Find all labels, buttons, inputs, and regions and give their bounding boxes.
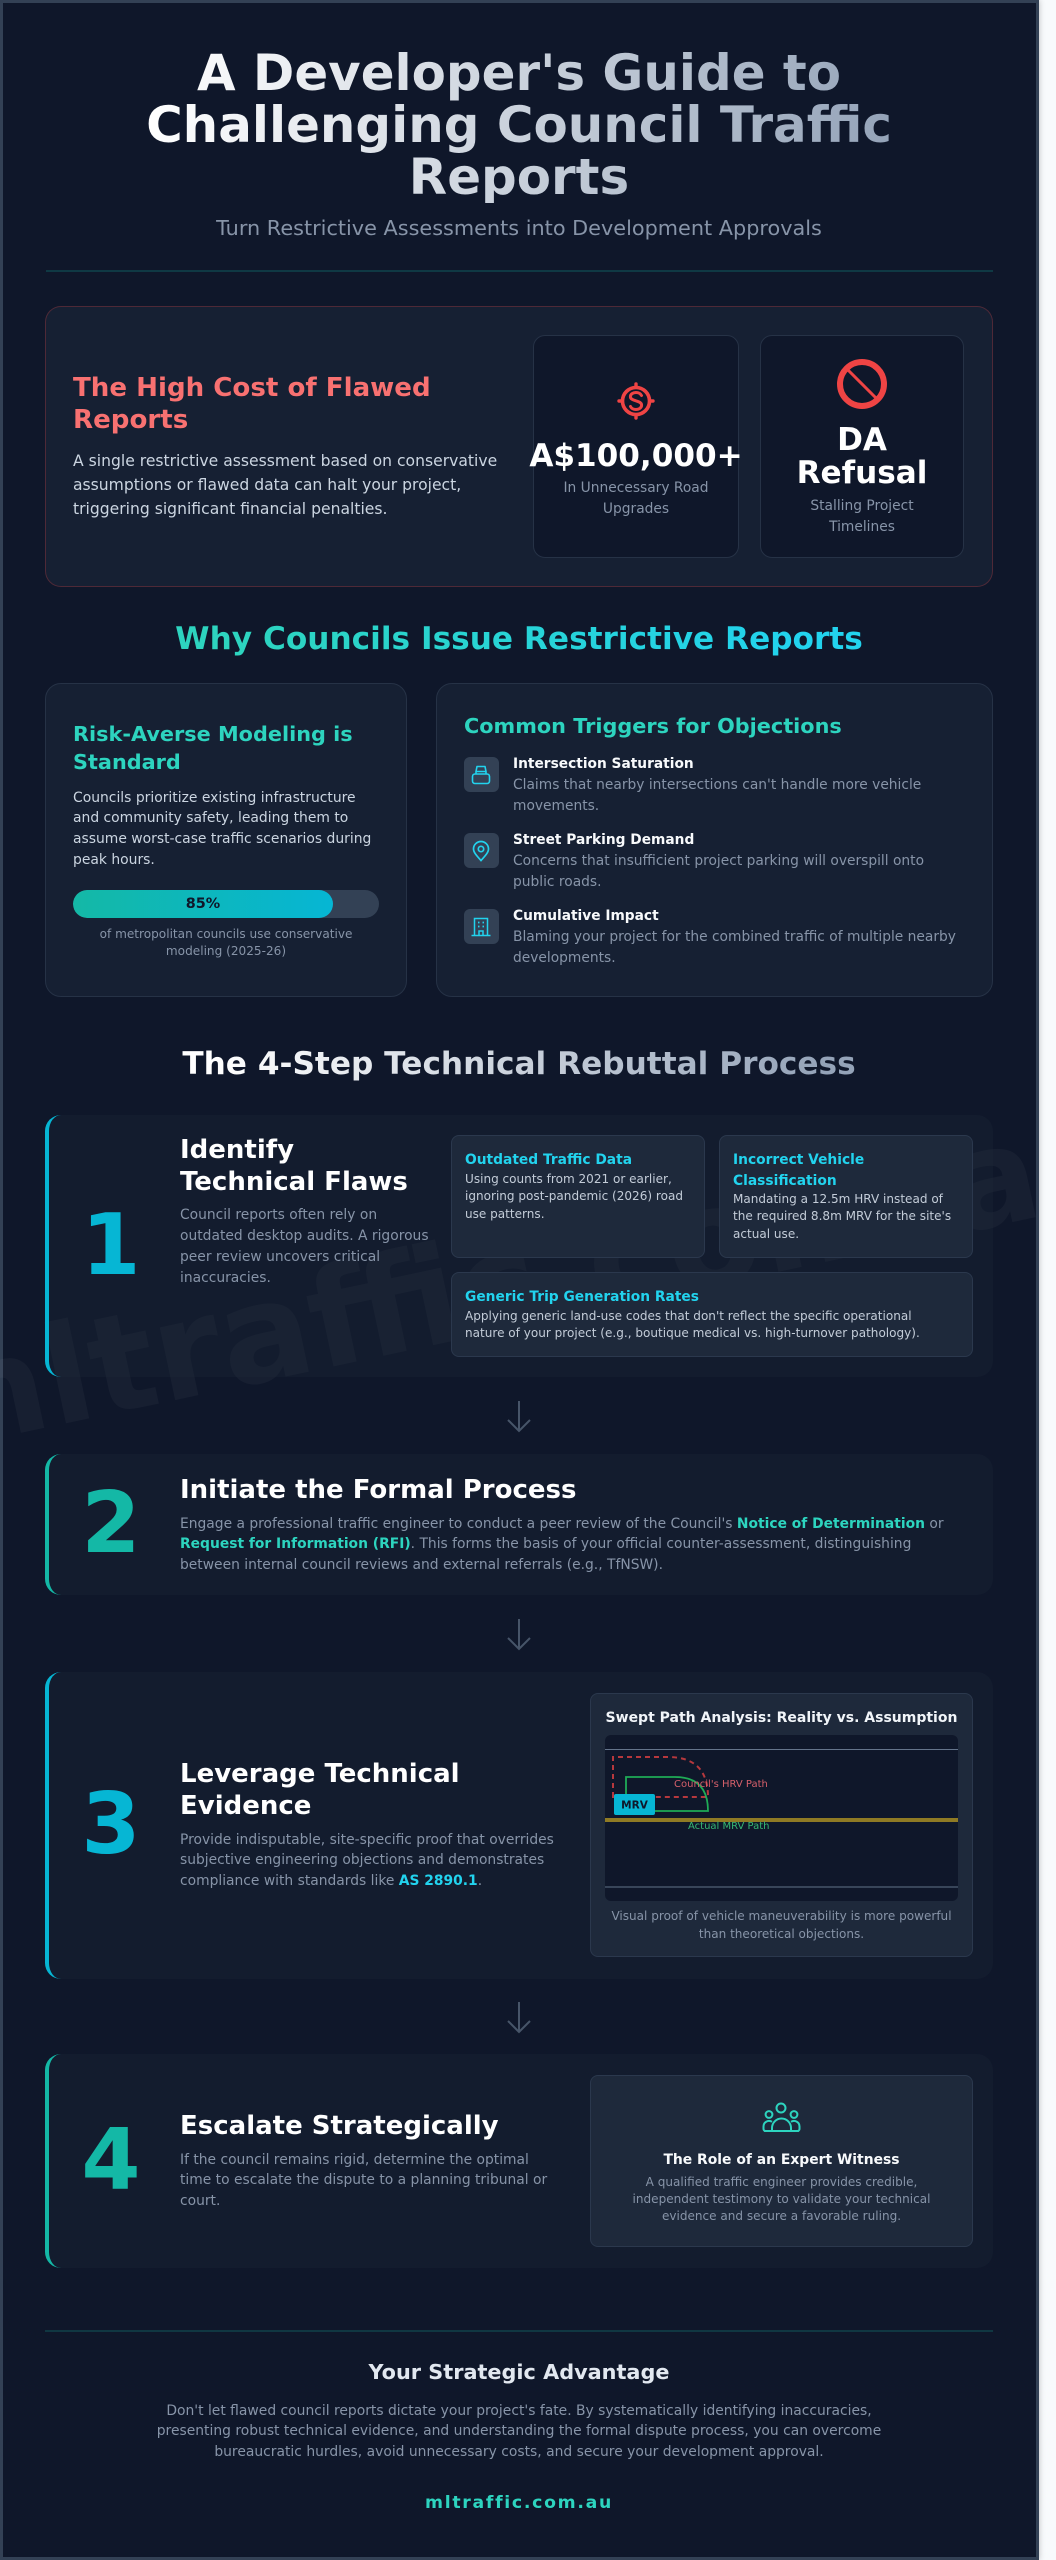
card text: use patterns. bbox=[465, 1207, 545, 1221]
stat label: refusal: Stalling Project bbox=[810, 498, 914, 514]
card text bbox=[465, 1309, 920, 1340]
step 1 description: inaccuracies. bbox=[180, 1270, 271, 1286]
panel: risk-averse modeling bbox=[45, 683, 407, 997]
step number 4: 4 bbox=[81, 2111, 141, 2210]
swept path diagram bbox=[605, 1735, 958, 1901]
trigger title: Intersection Saturation bbox=[513, 756, 694, 772]
step 4 description bbox=[180, 2152, 548, 2209]
stat label: cost bbox=[563, 480, 709, 517]
heading: risk-averse: Standard bbox=[73, 750, 181, 774]
trigger: intersection saturation bbox=[464, 756, 921, 814]
progress fill bbox=[73, 890, 333, 918]
card text: Applying generic land-use codes that don't reflect the specific operational bbox=[465, 1309, 912, 1323]
step 4 description: If the council remains rigid, determine the optimal bbox=[180, 2152, 529, 2168]
stat card: refusal bbox=[760, 335, 964, 558]
card: incorrect vehicle classification bbox=[719, 1135, 973, 1258]
arrow: step 2 to 3 bbox=[507, 1619, 531, 1650]
icon: building bbox=[464, 909, 499, 944]
card heading: Generic Trip Generation Rates bbox=[465, 1289, 699, 1305]
card heading: Incorrect Vehicle bbox=[733, 1152, 864, 1168]
MRV vehicle: MRV bbox=[621, 1800, 649, 1812]
card text: nature of your project (e.g., boutique medical vs. high-turnover pathology). bbox=[465, 1326, 920, 1340]
icon: people group bbox=[762, 2102, 800, 2132]
icon: map pin bbox=[464, 833, 499, 868]
council HRV path bbox=[613, 1757, 708, 1797]
step 3 description bbox=[180, 1832, 554, 1889]
step number 1: 1 bbox=[81, 1196, 141, 1295]
step 3 title: Evidence bbox=[180, 1791, 311, 1821]
title: Reports bbox=[409, 148, 629, 206]
card text bbox=[465, 1172, 683, 1221]
MRV vehicle bbox=[614, 1794, 655, 1815]
trigger description bbox=[513, 929, 956, 966]
expert witness description bbox=[633, 2175, 930, 2223]
step number 3: 3 bbox=[81, 1775, 141, 1874]
text: high cost description bbox=[73, 452, 497, 518]
subtitle: Turn Restrictive Assessments into Development Approvals bbox=[216, 216, 822, 240]
heading: common triggers: Common Triggers for Objections bbox=[464, 714, 842, 738]
stat card: cost bbox=[533, 335, 739, 558]
text: risk-averse description: peak hours. bbox=[73, 852, 155, 868]
text: risk-averse description: assume worst-case traffic scenarios during bbox=[73, 831, 371, 847]
heading: 4-step process: The 4-Step Technical Rebuttal Process bbox=[182, 1046, 856, 1082]
text: high cost description: A single restrictive assessment based on conservative bbox=[73, 452, 497, 470]
footer text: presenting robust technical evidence, and understanding the formal dispute process, you can overcome bbox=[157, 2423, 881, 2439]
progress bar: 85 percent bbox=[73, 890, 379, 918]
step 1 description: Council reports often rely on bbox=[180, 1207, 377, 1223]
step 3: leverage technical evidence bbox=[45, 1672, 993, 1979]
trigger description: Blaming your project for the combined traffic of multiple nearby bbox=[513, 929, 956, 945]
progress fill: 85% bbox=[186, 896, 220, 912]
footer text: Don't let flawed council reports dictate your project's fate. By systematically identifying inaccuracies, bbox=[166, 2403, 872, 2419]
expert witness description: A qualified traffic engineer provides credible, bbox=[646, 2175, 917, 2189]
trigger description: movements. bbox=[513, 798, 599, 814]
icon: prohibited sign bbox=[837, 359, 887, 409]
heading: why councils: Why Councils Issue Restrictive Reports bbox=[175, 621, 863, 657]
swept path caption bbox=[611, 1909, 952, 1941]
step 2 description: Request for Information (RFI). This forms the basis of your official counter-assessment, distinguishing bbox=[180, 1536, 911, 1552]
card text: ignoring post-pandemic (2026) road bbox=[465, 1189, 683, 1203]
footer heading: Your Strategic Advantage bbox=[369, 2360, 669, 2384]
arrow: step 1 to 2 bbox=[507, 1401, 531, 1432]
card text bbox=[733, 1192, 951, 1241]
panel: high cost bbox=[45, 306, 993, 587]
text: high cost description: triggering significant financial penalties. bbox=[73, 500, 388, 518]
swept path caption: Visual proof of vehicle maneuverability is more powerful bbox=[611, 1909, 952, 1923]
heading: high cost: Reports bbox=[73, 405, 188, 435]
stat value: refusal: Refusal bbox=[797, 455, 927, 491]
step 2 description bbox=[180, 1516, 944, 1573]
card heading: Outdated Traffic Data bbox=[465, 1152, 632, 1168]
step 1 description: peer review uncovers critical bbox=[180, 1249, 380, 1265]
panel: swept path analysis bbox=[590, 1693, 973, 1957]
step 2 description: between internal council reviews and external referrals (e.g., TfNSW). bbox=[180, 1557, 663, 1573]
text: risk-averse description bbox=[73, 790, 371, 868]
stat value: cost: A$100,000+ bbox=[529, 438, 743, 474]
trigger description: public roads. bbox=[513, 874, 602, 890]
step 1 description bbox=[180, 1207, 429, 1286]
step 1 title: Identify bbox=[180, 1135, 294, 1165]
step 4 description: court. bbox=[180, 2193, 220, 2209]
step number 2: 2 bbox=[81, 1474, 141, 1573]
step 3 title: Leverage Technical bbox=[180, 1759, 460, 1789]
caption: progress: of metropolitan councils use conservative bbox=[100, 926, 352, 940]
heading: high cost bbox=[73, 373, 431, 435]
step 1 title: Technical Flaws bbox=[180, 1167, 408, 1197]
card text: actual use. bbox=[733, 1227, 799, 1241]
step 4 title: Escalate Strategically bbox=[180, 2111, 499, 2141]
trigger description: Concerns that insufficient project parking will overspill onto bbox=[513, 853, 924, 869]
step 2 description: Engage a professional traffic engineer to conduct a peer review of the Council's Notice of Determination or bbox=[180, 1516, 944, 1532]
label: actual path: Actual MRV Path bbox=[688, 1821, 770, 1832]
expert witness description: independent testimony to validate your technical bbox=[633, 2192, 930, 2206]
trigger: street parking demand bbox=[464, 832, 924, 890]
stat value: refusal: DA bbox=[837, 422, 887, 458]
card text: Mandating a 12.5m HRV instead of bbox=[733, 1192, 943, 1206]
step 1 title bbox=[180, 1135, 408, 1197]
stat label: refusal bbox=[810, 498, 914, 535]
title: Challenging Council Traffic bbox=[146, 96, 892, 154]
trigger description bbox=[513, 853, 924, 890]
stat value: refusal bbox=[797, 422, 927, 491]
caption: progress bbox=[100, 926, 352, 958]
step 3 description: Provide indisputable, site-specific proof that overrides bbox=[180, 1832, 554, 1848]
card: generic trip generation rates bbox=[451, 1272, 973, 1357]
heading: risk-averse: Risk-Averse Modeling is bbox=[73, 722, 353, 746]
step 4 description: time to escalate the dispute to a planning tribunal or bbox=[180, 2172, 547, 2188]
card: outdated traffic data bbox=[451, 1135, 705, 1258]
trigger: cumulative impact bbox=[464, 908, 956, 966]
step 1 description: outdated desktop audits. A rigorous bbox=[180, 1228, 429, 1244]
expert witness title: The Role of an Expert Witness bbox=[663, 2152, 900, 2168]
step 1: identify technical flaws bbox=[45, 1115, 993, 1377]
icon: dollar target bbox=[617, 382, 655, 420]
stat label: cost: Upgrades bbox=[603, 501, 669, 517]
caption: progress: modeling (2025-26) bbox=[166, 944, 286, 958]
step 3 description: compliance with standards like AS 2890.1. bbox=[180, 1873, 482, 1889]
title bbox=[119, 46, 919, 203]
actual MRV path bbox=[626, 1777, 708, 1811]
card text: Using counts from 2021 or earlier, bbox=[465, 1172, 672, 1186]
swept path caption: than theoretical objections. bbox=[699, 1927, 864, 1941]
step 2 title: Initiate the Formal Process bbox=[180, 1475, 576, 1505]
label: council path: Council's HRV Path bbox=[674, 1779, 768, 1790]
panel: common triggers bbox=[436, 683, 993, 997]
icon: intersection bbox=[464, 757, 499, 792]
step 3 title bbox=[180, 1759, 460, 1821]
text: high cost description: assumptions or flawed data can halt your project, bbox=[73, 476, 461, 494]
trigger description bbox=[513, 777, 921, 814]
footer text bbox=[157, 2403, 881, 2460]
step 4: escalate strategically bbox=[45, 2054, 993, 2268]
trigger title: Street Parking Demand bbox=[513, 832, 694, 848]
trigger title: Cumulative Impact bbox=[513, 908, 659, 924]
stat label: refusal: Timelines bbox=[829, 519, 895, 535]
text: risk-averse description: Councils prioritize existing infrastructure bbox=[73, 790, 356, 806]
trigger description: Claims that nearby intersections can't handle more vehicle bbox=[513, 777, 921, 793]
step 3 description: subjective engineering objections and demonstrates bbox=[180, 1852, 544, 1868]
card text: the required 8.8m MRV for the site's bbox=[733, 1209, 951, 1223]
step 2: initiate the formal process bbox=[45, 1454, 993, 1595]
swept path title: Swept Path Analysis: Reality vs. Assumption bbox=[606, 1710, 957, 1726]
text: risk-averse description: and community safety, leading them to bbox=[73, 810, 348, 826]
footer link: mltraffic.com.au bbox=[425, 2493, 613, 2513]
heading: risk-averse bbox=[73, 722, 353, 774]
heading: high cost: The High Cost of Flawed bbox=[73, 373, 431, 403]
panel: expert witness bbox=[590, 2075, 973, 2247]
arrow: step 3 to 4 bbox=[507, 2002, 531, 2034]
trigger description: developments. bbox=[513, 950, 616, 966]
card heading bbox=[733, 1152, 864, 1188]
expert witness description: evidence and secure a favorable ruling. bbox=[662, 2209, 901, 2223]
footer text: bureaucratic hurdles, avoid unnecessary costs, and secure your development approval. bbox=[214, 2444, 824, 2460]
title: A Developer's Guide to bbox=[197, 44, 841, 102]
card heading: Classification bbox=[733, 1172, 837, 1188]
stat label: cost: In Unnecessary Road bbox=[563, 480, 709, 496]
